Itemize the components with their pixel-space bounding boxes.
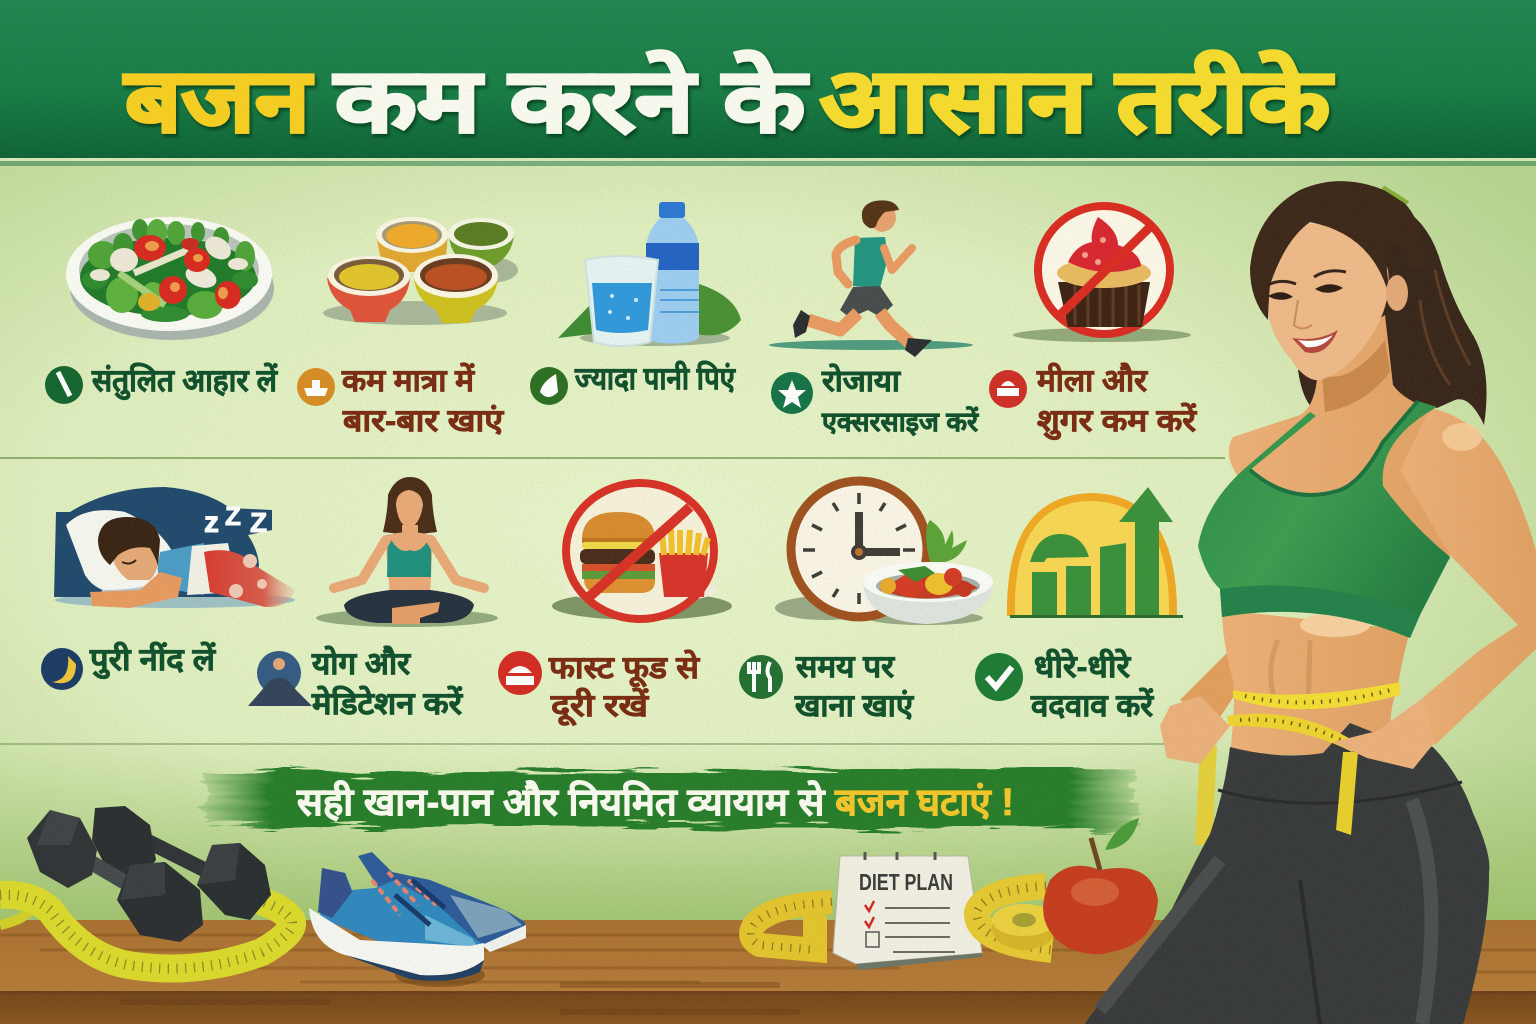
caption 7: योग और — [311, 645, 411, 681]
icon: sleeping person: z — [204, 506, 219, 539]
diet plan card — [833, 852, 982, 970]
top band — [1220, 585, 1420, 638]
caption 10: वदवाव करें — [1030, 687, 1154, 723]
icon: growth chart — [1007, 487, 1183, 618]
caption 7 — [248, 645, 463, 721]
head — [1265, 222, 1389, 380]
icon: small bowls — [323, 217, 518, 325]
title: आसान तरीके — [820, 50, 1334, 150]
caption 1: संतुलित आहार लें — [91, 362, 278, 400]
neck shadow — [1322, 340, 1390, 412]
icon: yoga woman — [316, 477, 498, 627]
icon: clock and bowl — [775, 481, 993, 625]
sports top — [1198, 401, 1450, 638]
banner text: सही खान-पान और नियमित व्यायाम से बजन घटाएं ! — [296, 780, 1014, 824]
row divider 2 — [0, 743, 1175, 745]
caption 4: एक्सरसाइज करें — [821, 406, 979, 437]
caption 2 — [297, 362, 505, 438]
right hand — [1333, 698, 1435, 769]
icon: sleeping person — [54, 487, 295, 608]
diet plan card: DIET PLAN — [859, 869, 953, 895]
mouth — [1292, 330, 1338, 353]
title: बजन — [123, 51, 314, 150]
caption 2: कम मात्रा में — [341, 362, 475, 398]
icon: runner — [769, 200, 973, 357]
icon: dumbbells — [27, 806, 271, 942]
left hand — [1160, 696, 1230, 764]
caption 9 — [739, 649, 915, 723]
woman figure — [1085, 181, 1536, 1024]
caption 3: ज्यादा पानी पिएं — [574, 360, 737, 396]
wooden table — [0, 920, 1536, 1024]
eyes and brows — [1268, 284, 1343, 300]
caption 8: दूरी रखें — [550, 687, 650, 726]
caption 4 — [771, 363, 979, 437]
hair behind neck — [1298, 365, 1350, 412]
caption 5 — [989, 362, 1197, 440]
hanging tape left — [1195, 746, 1217, 845]
caption 2: बार-बार खाएं — [342, 403, 505, 438]
caption 5: शुगर कम करें — [1037, 402, 1197, 440]
hair top — [1250, 181, 1425, 320]
top neckline — [1250, 401, 1418, 495]
caption 6 — [41, 641, 216, 690]
icon: no cupcake — [1013, 206, 1191, 342]
icon: no burger and fries — [552, 483, 732, 620]
left forearm — [1180, 645, 1238, 725]
shoulder highlight — [1442, 423, 1482, 451]
title: कम करने के — [333, 50, 809, 150]
caption 10: धीरे-धीरे — [1034, 648, 1131, 684]
caption 10 — [975, 648, 1154, 723]
nose — [1294, 300, 1312, 328]
background panel — [0, 160, 1536, 930]
icon: water glass and bottle — [558, 202, 741, 346]
hair tie — [1383, 187, 1408, 203]
icon: running shoes — [309, 852, 526, 987]
caption 4: रोजाया — [821, 363, 901, 398]
title — [123, 50, 1334, 150]
icon: sleeping person: Z — [225, 501, 241, 531]
caption 7: मेडिटेशन करें — [311, 685, 463, 721]
banner — [205, 768, 1135, 829]
icon: apple — [1043, 818, 1158, 954]
header band — [0, 0, 1536, 166]
ponytail strands — [1420, 270, 1470, 385]
caption 5: मीला और — [1036, 362, 1148, 398]
right arm — [1400, 408, 1536, 745]
caption 9: समय पर — [795, 649, 895, 684]
caption 3 — [530, 360, 737, 405]
neck and chest — [1229, 315, 1450, 560]
ear — [1386, 275, 1408, 311]
caption 8: फास्ट फूड से — [548, 649, 700, 688]
ponytail — [1350, 195, 1487, 425]
measuring tape right — [751, 886, 1056, 950]
caption 8 — [498, 649, 700, 726]
caption 1 — [45, 362, 278, 404]
measuring tape left — [0, 892, 292, 969]
icon: sleeping person: Z — [250, 507, 267, 538]
leggings — [1085, 723, 1489, 1024]
caption 9: खाना खाएं — [794, 688, 915, 723]
waist tape — [1227, 682, 1400, 752]
caption 6: पुरी नींद लें — [89, 641, 216, 679]
icon: salad plate — [66, 217, 274, 340]
midriff — [1222, 610, 1410, 755]
row divider 1 — [0, 457, 1225, 459]
